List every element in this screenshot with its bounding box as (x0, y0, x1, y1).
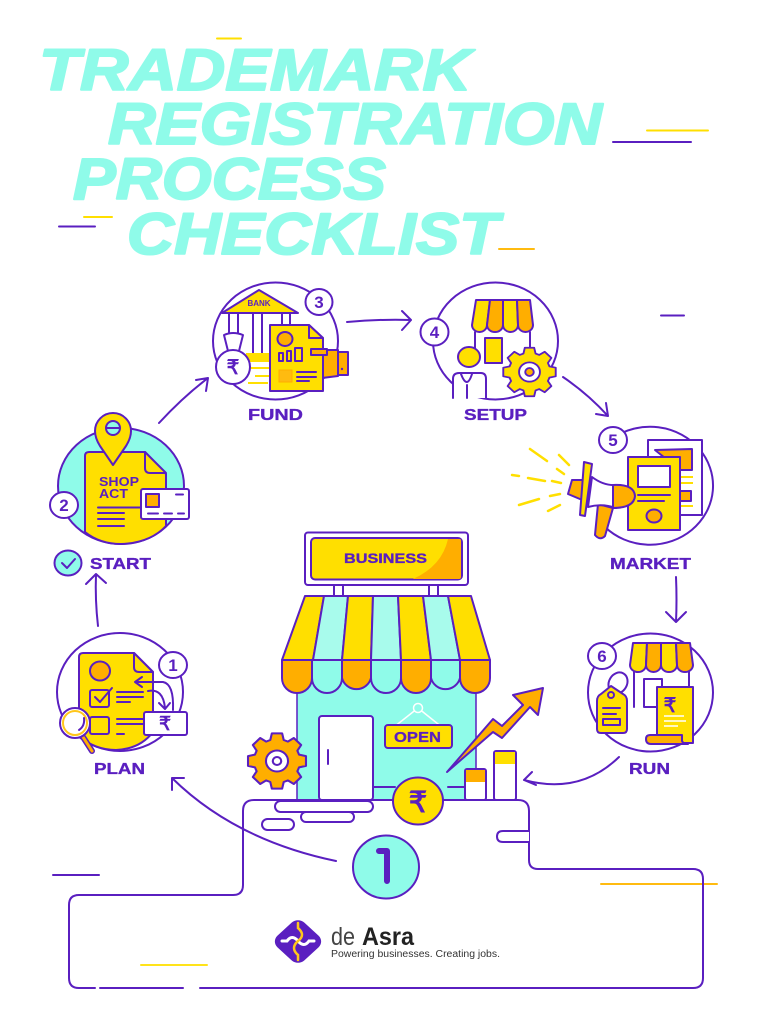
icon: hand (318, 350, 348, 378)
icon: bank: BANK (247, 299, 271, 308)
label: market: MARKET (610, 556, 692, 573)
icon: location pin (95, 413, 131, 465)
business sign: BUSINESS (344, 550, 427, 566)
icon: money bag (216, 333, 250, 384)
icon: sound rays (512, 449, 569, 511)
icon: shop act document (85, 452, 166, 544)
label: setup: SETUP (464, 407, 527, 424)
badge: 1: 1 (168, 656, 178, 675)
icon: person (453, 347, 486, 398)
number badge: 1 (353, 836, 419, 898)
logo: de Asra (271, 917, 500, 966)
step 1: plan (57, 633, 187, 778)
badge: 2: 2 (59, 496, 69, 515)
rupee coin: ₹ (409, 787, 427, 819)
circle: start (58, 428, 184, 544)
arrow: plan to start (86, 574, 106, 626)
badge: 3: 3 (314, 293, 324, 312)
icon: receipt: ₹ (664, 695, 677, 717)
platform outline (69, 800, 703, 988)
icon: price tag (597, 669, 631, 733)
business sign (305, 532, 468, 595)
title: REGISTRATION (108, 92, 603, 157)
badge: 6 (588, 643, 616, 669)
logo wordmark: de (331, 923, 355, 951)
title: TRADEMARK (39, 38, 476, 103)
icon: shop act document: ACT (99, 487, 128, 501)
circle: market (605, 427, 713, 545)
store body (297, 680, 476, 800)
icon: id card (141, 489, 189, 519)
arrow: run to store (524, 757, 619, 785)
bar chart columns (465, 751, 516, 800)
label: start: START (90, 556, 152, 573)
icon: gear (248, 733, 306, 789)
logo wordmark (331, 923, 415, 951)
arrow: market to run (666, 577, 686, 622)
icon: brochure (628, 440, 702, 530)
badge: 1 (159, 652, 187, 678)
icon: bank (222, 290, 298, 383)
icon: receipt (646, 687, 693, 744)
icon: banknote: ₹ (159, 714, 171, 735)
arrow: fund to setup (347, 311, 411, 330)
store (69, 532, 703, 988)
door (319, 716, 373, 800)
step 2: start (50, 413, 189, 576)
icon: small shop (630, 643, 693, 707)
arrow: business to plan (172, 778, 336, 861)
badge: 4 (420, 318, 448, 346)
icon: gear (503, 348, 556, 396)
title (39, 38, 603, 267)
icon: money bag: ₹ (227, 357, 240, 379)
title: PROCESS (73, 147, 386, 212)
open sign (385, 704, 452, 748)
badge: 2 (50, 492, 78, 518)
title: CHECKLIST (127, 202, 504, 267)
icon: small shop (472, 300, 533, 363)
circle: plan (57, 633, 183, 751)
step 6: run (588, 634, 713, 778)
icon: banknote (144, 712, 187, 735)
awning (282, 596, 490, 693)
icon: checklist document (79, 653, 153, 750)
tagline: Powering businesses. Creating jobs. (331, 949, 500, 960)
icon: document with chart (270, 325, 327, 391)
badge: 5: 5 (608, 431, 618, 450)
arrow: setup to market (563, 377, 608, 416)
logo mark (271, 917, 325, 966)
growth arrow (447, 688, 543, 772)
logo wordmark: Asra (362, 923, 415, 951)
badge: 3 (306, 289, 332, 315)
badge: 6: 6 (597, 647, 607, 666)
label: fund: FUND (248, 407, 303, 424)
icon: exchange arrows (135, 677, 173, 710)
badge: 5 (599, 427, 627, 453)
icon: megaphone (568, 462, 635, 538)
badge: 4: 4 (430, 323, 440, 342)
icon: check badge (54, 550, 82, 576)
circle: setup (433, 282, 558, 400)
icon: magnifier (60, 708, 92, 751)
step 3: fund (213, 282, 348, 424)
label: plan: PLAN (94, 761, 145, 778)
step 4: setup (420, 282, 558, 424)
rupee coin (393, 778, 443, 824)
label: run: RUN (629, 761, 670, 778)
platform pills (262, 801, 529, 842)
circle: fund (213, 282, 338, 400)
open sign: OPEN (394, 730, 441, 746)
arrow: start to fund (159, 378, 208, 423)
circle: run (588, 634, 713, 752)
step 5: market (512, 427, 713, 573)
icon: shop act document: SHOP (99, 475, 139, 489)
